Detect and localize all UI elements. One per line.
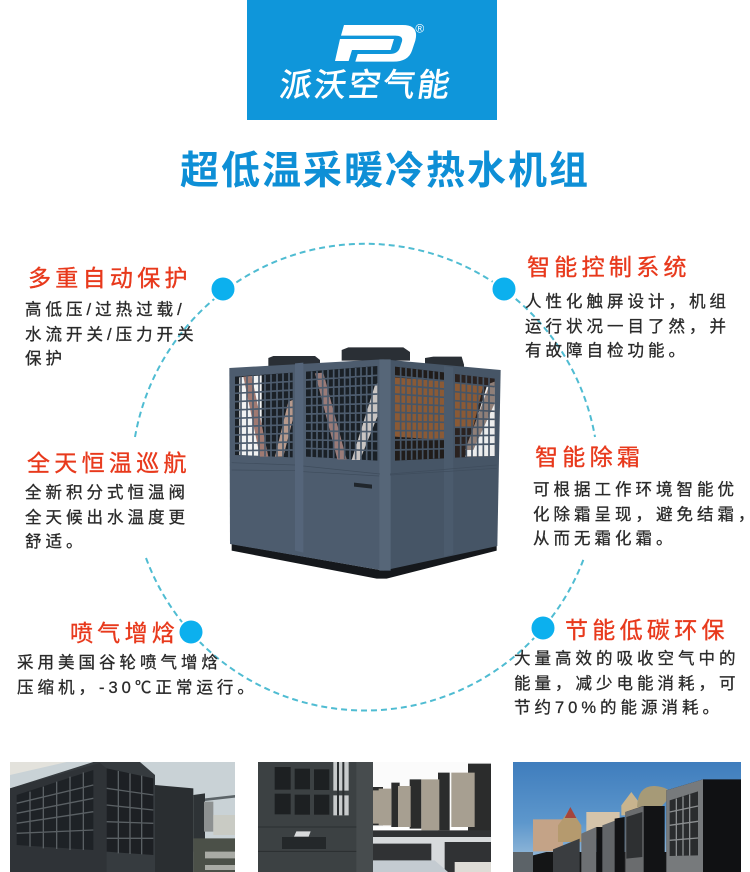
description bbox=[17, 654, 258, 697]
feature: multiple auto protection bbox=[25, 265, 198, 368]
heading: 智能除霜 bbox=[535, 444, 644, 470]
feature: smart defrost bbox=[533, 444, 750, 548]
left face bbox=[229, 359, 383, 571]
feature: vapor injection bbox=[17, 620, 258, 697]
panel seams bbox=[232, 463, 497, 476]
description: 舒适。 bbox=[25, 533, 86, 551]
description bbox=[25, 300, 198, 368]
row of units bbox=[373, 762, 491, 827]
grille panel 4 bbox=[455, 374, 495, 458]
description bbox=[514, 650, 740, 717]
heading: 喷气增焓 bbox=[70, 620, 179, 646]
description: 压缩机，-30℃正常运行。 bbox=[17, 679, 258, 697]
description: 节约70%的能源消耗。 bbox=[514, 699, 723, 717]
grille panel 3 bbox=[395, 367, 444, 461]
description bbox=[525, 292, 730, 360]
description: 水流开关/压力开关 bbox=[25, 326, 198, 344]
photo: units with city skyline bbox=[513, 762, 741, 872]
fans on top bbox=[268, 347, 464, 370]
grille panel 1 bbox=[235, 373, 293, 457]
description: 人性化触屏设计，机组 bbox=[525, 293, 730, 311]
description: 高低压/过热过载/ bbox=[25, 301, 186, 319]
description: 运行状况一目了然，并 bbox=[525, 318, 730, 336]
icon: PD logo mark bbox=[335, 22, 424, 62]
brand plate bbox=[354, 483, 372, 489]
title: 超低温采暖冷热水机组 bbox=[180, 150, 590, 193]
description: 能量，减少电能消耗，可 bbox=[514, 675, 740, 693]
feature: smart control system bbox=[525, 254, 730, 360]
photo: rooftop units bbox=[10, 762, 235, 872]
description: 采用美国谷轮喷气增焓 bbox=[17, 654, 222, 672]
feature: all-day constant temperature bbox=[25, 450, 191, 551]
description: 可根据工作环境智能优 bbox=[533, 481, 738, 499]
row of black units bbox=[533, 852, 741, 872]
heading: 全天恒温巡航 bbox=[27, 450, 191, 476]
description: 保护 bbox=[25, 350, 66, 368]
logo panel bbox=[247, 0, 497, 120]
logo wordmark: 派沃空气能 bbox=[277, 67, 455, 103]
description: 全天候出水温度更 bbox=[25, 509, 189, 527]
heading: 节能低碳环保 bbox=[565, 617, 729, 643]
heading: 多重自动保护 bbox=[28, 265, 192, 291]
corner posts bbox=[295, 363, 303, 553]
base bbox=[232, 544, 497, 579]
description bbox=[533, 480, 750, 548]
grille panel 2 bbox=[306, 366, 377, 461]
feature: energy saving bbox=[514, 617, 740, 717]
photo: unit closeup and row of units bbox=[258, 762, 491, 872]
heat pump unit illustration bbox=[229, 347, 501, 579]
description: 有故障自检功能。 bbox=[525, 342, 689, 360]
heading: 智能控制系统 bbox=[527, 254, 691, 280]
description: 大量高效的吸收空气中的 bbox=[514, 650, 740, 668]
description: 全新积分式恒温阀 bbox=[25, 484, 189, 502]
icon: PD logo mark: ® bbox=[415, 22, 424, 36]
description: 从而无霜化霜。 bbox=[533, 530, 676, 548]
description bbox=[25, 484, 189, 551]
right face bbox=[383, 359, 501, 571]
